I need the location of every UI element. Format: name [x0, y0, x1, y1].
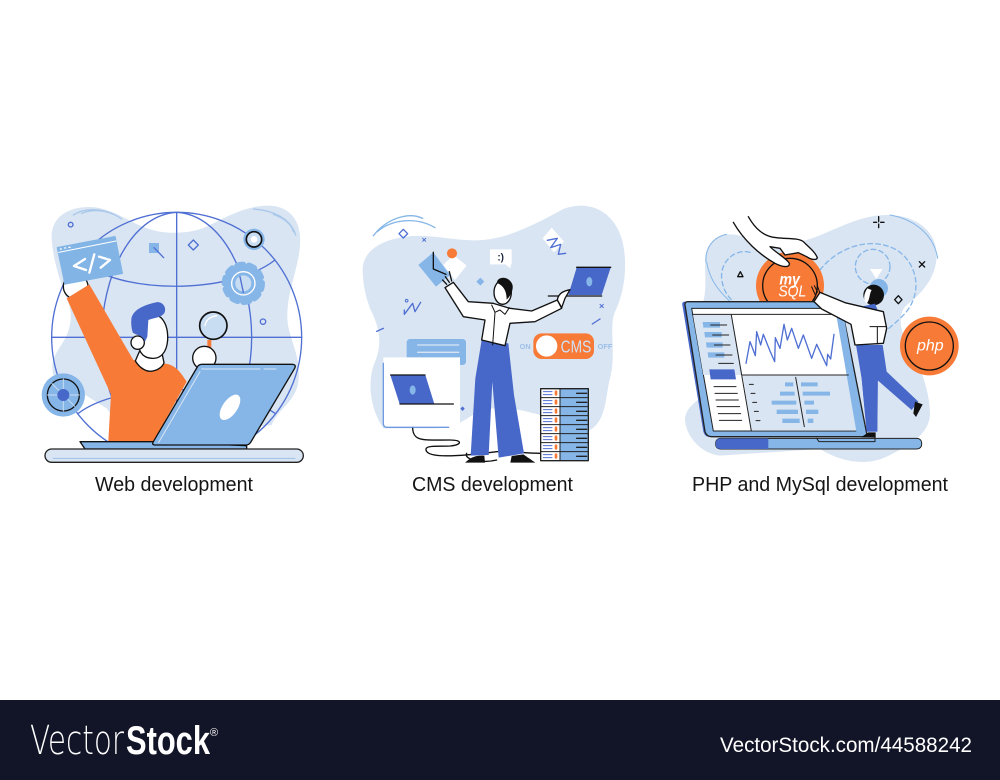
shirt details [492, 305, 509, 345]
envelope [418, 252, 450, 287]
second hand [193, 346, 216, 370]
top hand [733, 217, 817, 267]
hand fingers [812, 286, 820, 294]
sidebar items [703, 322, 742, 420]
pants [856, 345, 918, 432]
hair [497, 278, 513, 300]
back shoe [913, 402, 923, 417]
code window [57, 237, 122, 284]
heading: web development: Web development [95, 474, 253, 496]
CMS toggle: OFF [598, 342, 613, 351]
neck [135, 352, 164, 371]
laptop base [716, 437, 922, 449]
php coin [900, 317, 959, 375]
orange mysql coin: my [779, 271, 801, 288]
blue head halo and triangle [869, 269, 888, 298]
CMS toggle: ON [520, 342, 531, 351]
desk [45, 449, 303, 462]
server rack [541, 389, 588, 461]
torso and arm [814, 292, 887, 345]
ear [131, 336, 144, 349]
laptop base [80, 442, 247, 449]
note with zigzag [543, 228, 566, 254]
dashed orbit lines [722, 244, 916, 333]
globe [52, 212, 302, 462]
footer image id: VectorStock.com/44588242 [720, 734, 972, 757]
front foot [861, 432, 876, 438]
footer logo [30, 718, 218, 764]
footer logo: Vector [30, 718, 124, 764]
panel: CMS development illustration [363, 206, 625, 463]
magnifying glass [200, 312, 227, 349]
decorative arcs and small shapes [73, 209, 296, 235]
panel: web development illustration [42, 206, 303, 462]
shirt with arms [445, 282, 562, 346]
small icons [738, 217, 925, 304]
php coin: php [916, 337, 944, 354]
front leg over laptop edge [857, 345, 878, 432]
blue collar [862, 304, 878, 312]
icon: small gear [245, 230, 263, 249]
heading: CMS development: CMS development [412, 474, 573, 496]
background blob [363, 206, 625, 431]
mini laptop [391, 375, 453, 404]
orange mysql coin: SQL [778, 284, 806, 301]
held laptop [548, 267, 611, 296]
CMS toggle: CMS [561, 337, 591, 357]
head [138, 315, 168, 358]
footer logo: Stock [126, 719, 211, 763]
footer bar [0, 700, 1000, 780]
hair [131, 302, 165, 342]
head [494, 280, 511, 304]
background blob [685, 215, 937, 462]
laptop lid [153, 364, 295, 445]
right hand [557, 290, 570, 308]
orange mysql coin [756, 252, 824, 320]
small shapes [377, 229, 603, 411]
laptop [682, 302, 867, 437]
chat box [407, 339, 466, 365]
heading: PHP and MySql development: PHP and MySql development [692, 474, 948, 496]
CMS toggle [520, 333, 613, 359]
speech bubble [490, 249, 512, 268]
icon: large gear [225, 265, 262, 302]
decorative arcs [373, 216, 435, 236]
person body in orange sweater [67, 284, 187, 442]
line chart [746, 324, 834, 366]
panel: PHP and MySql illustration [682, 215, 959, 462]
speech bubble: :) [497, 252, 504, 263]
left hand [443, 272, 452, 284]
background blob [52, 206, 300, 440]
shoes [465, 454, 535, 463]
icon: diamond [188, 240, 198, 250]
orange dot [447, 248, 457, 258]
pants [471, 340, 524, 458]
icon: aperture [42, 373, 85, 417]
data bars [749, 377, 830, 427]
raised hand [63, 274, 88, 299]
icon: square [149, 243, 164, 258]
white card [383, 357, 460, 427]
footer logo: ® [210, 727, 218, 739]
cable [413, 428, 540, 461]
note behind envelope [443, 255, 467, 280]
head [863, 285, 884, 305]
shirt details [870, 327, 886, 344]
